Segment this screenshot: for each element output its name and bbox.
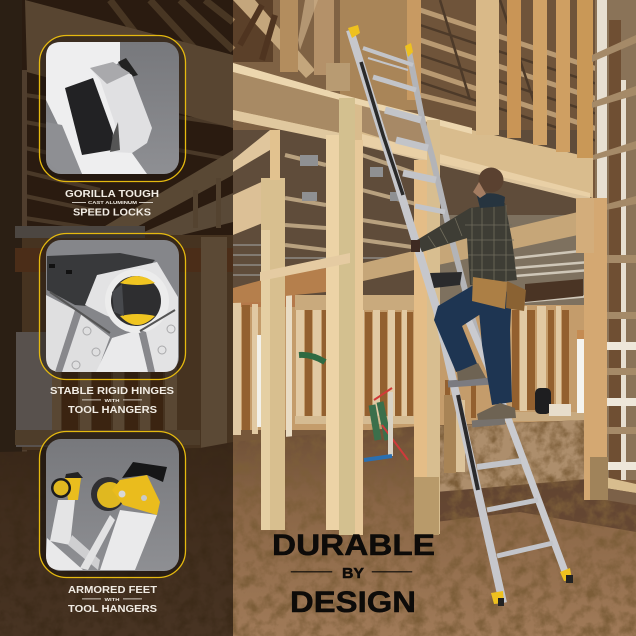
vertical studs above beam [476,0,593,158]
panel frame [40,234,186,380]
tool belt [472,277,526,311]
middle joist area [233,130,595,305]
caption: armored feet: TOOL HANGERS [68,604,157,615]
caption: hinges: TOOL HANGERS [68,405,157,416]
caption: armored feet: ARMORED FEET [68,585,157,596]
panel frame [40,432,186,578]
panel: hinges [40,234,186,416]
caption: speed locks: CAST ALUMINUM [88,200,137,205]
photo: speed lock [46,42,179,174]
ladder rungs [363,48,553,556]
jacket [417,203,517,285]
jeans [434,280,512,405]
dark translucent left panel [0,0,233,636]
ladder rails [350,30,567,603]
title: durable by design: BY [342,565,364,582]
tool tray on ladder [430,272,462,288]
caption: armored feet [68,585,157,615]
photo: hinge [46,240,179,372]
title: durable by design: DURABLE [272,529,435,562]
hood [477,193,505,208]
back wall framing [233,270,591,450]
panel frame [40,36,186,182]
right lattice framing [576,0,636,505]
caption: speed locks [65,189,159,218]
wooden posts [260,98,465,535]
panel: armored feet [40,432,186,615]
caption: speed locks: SPEED LOCKS [73,208,151,218]
photo: ladder feet [46,439,179,571]
left rafters and beams [0,0,235,530]
main beam [233,63,593,235]
floor [0,420,636,636]
caption: armored feet: WITH [104,597,120,602]
ladder yellow caps [348,25,572,604]
title: durable by design: DESIGN [290,586,416,619]
caption: hinges: WITH [104,398,120,403]
head [478,168,504,192]
caption: hinges: STABLE RIGID HINGES [50,386,174,397]
cart with green hose [299,355,571,460]
caption: speed locks: GORILLA TOUGH [65,189,159,200]
ladder steps [448,381,493,384]
panel: speed locks [40,36,186,218]
title: durable by design [272,529,435,619]
worker climbing ladder [411,168,526,420]
caption: hinges [50,386,174,416]
ladder [348,25,573,606]
boots [457,363,516,420]
glove hand [411,240,420,252]
upper rafters [233,0,636,150]
